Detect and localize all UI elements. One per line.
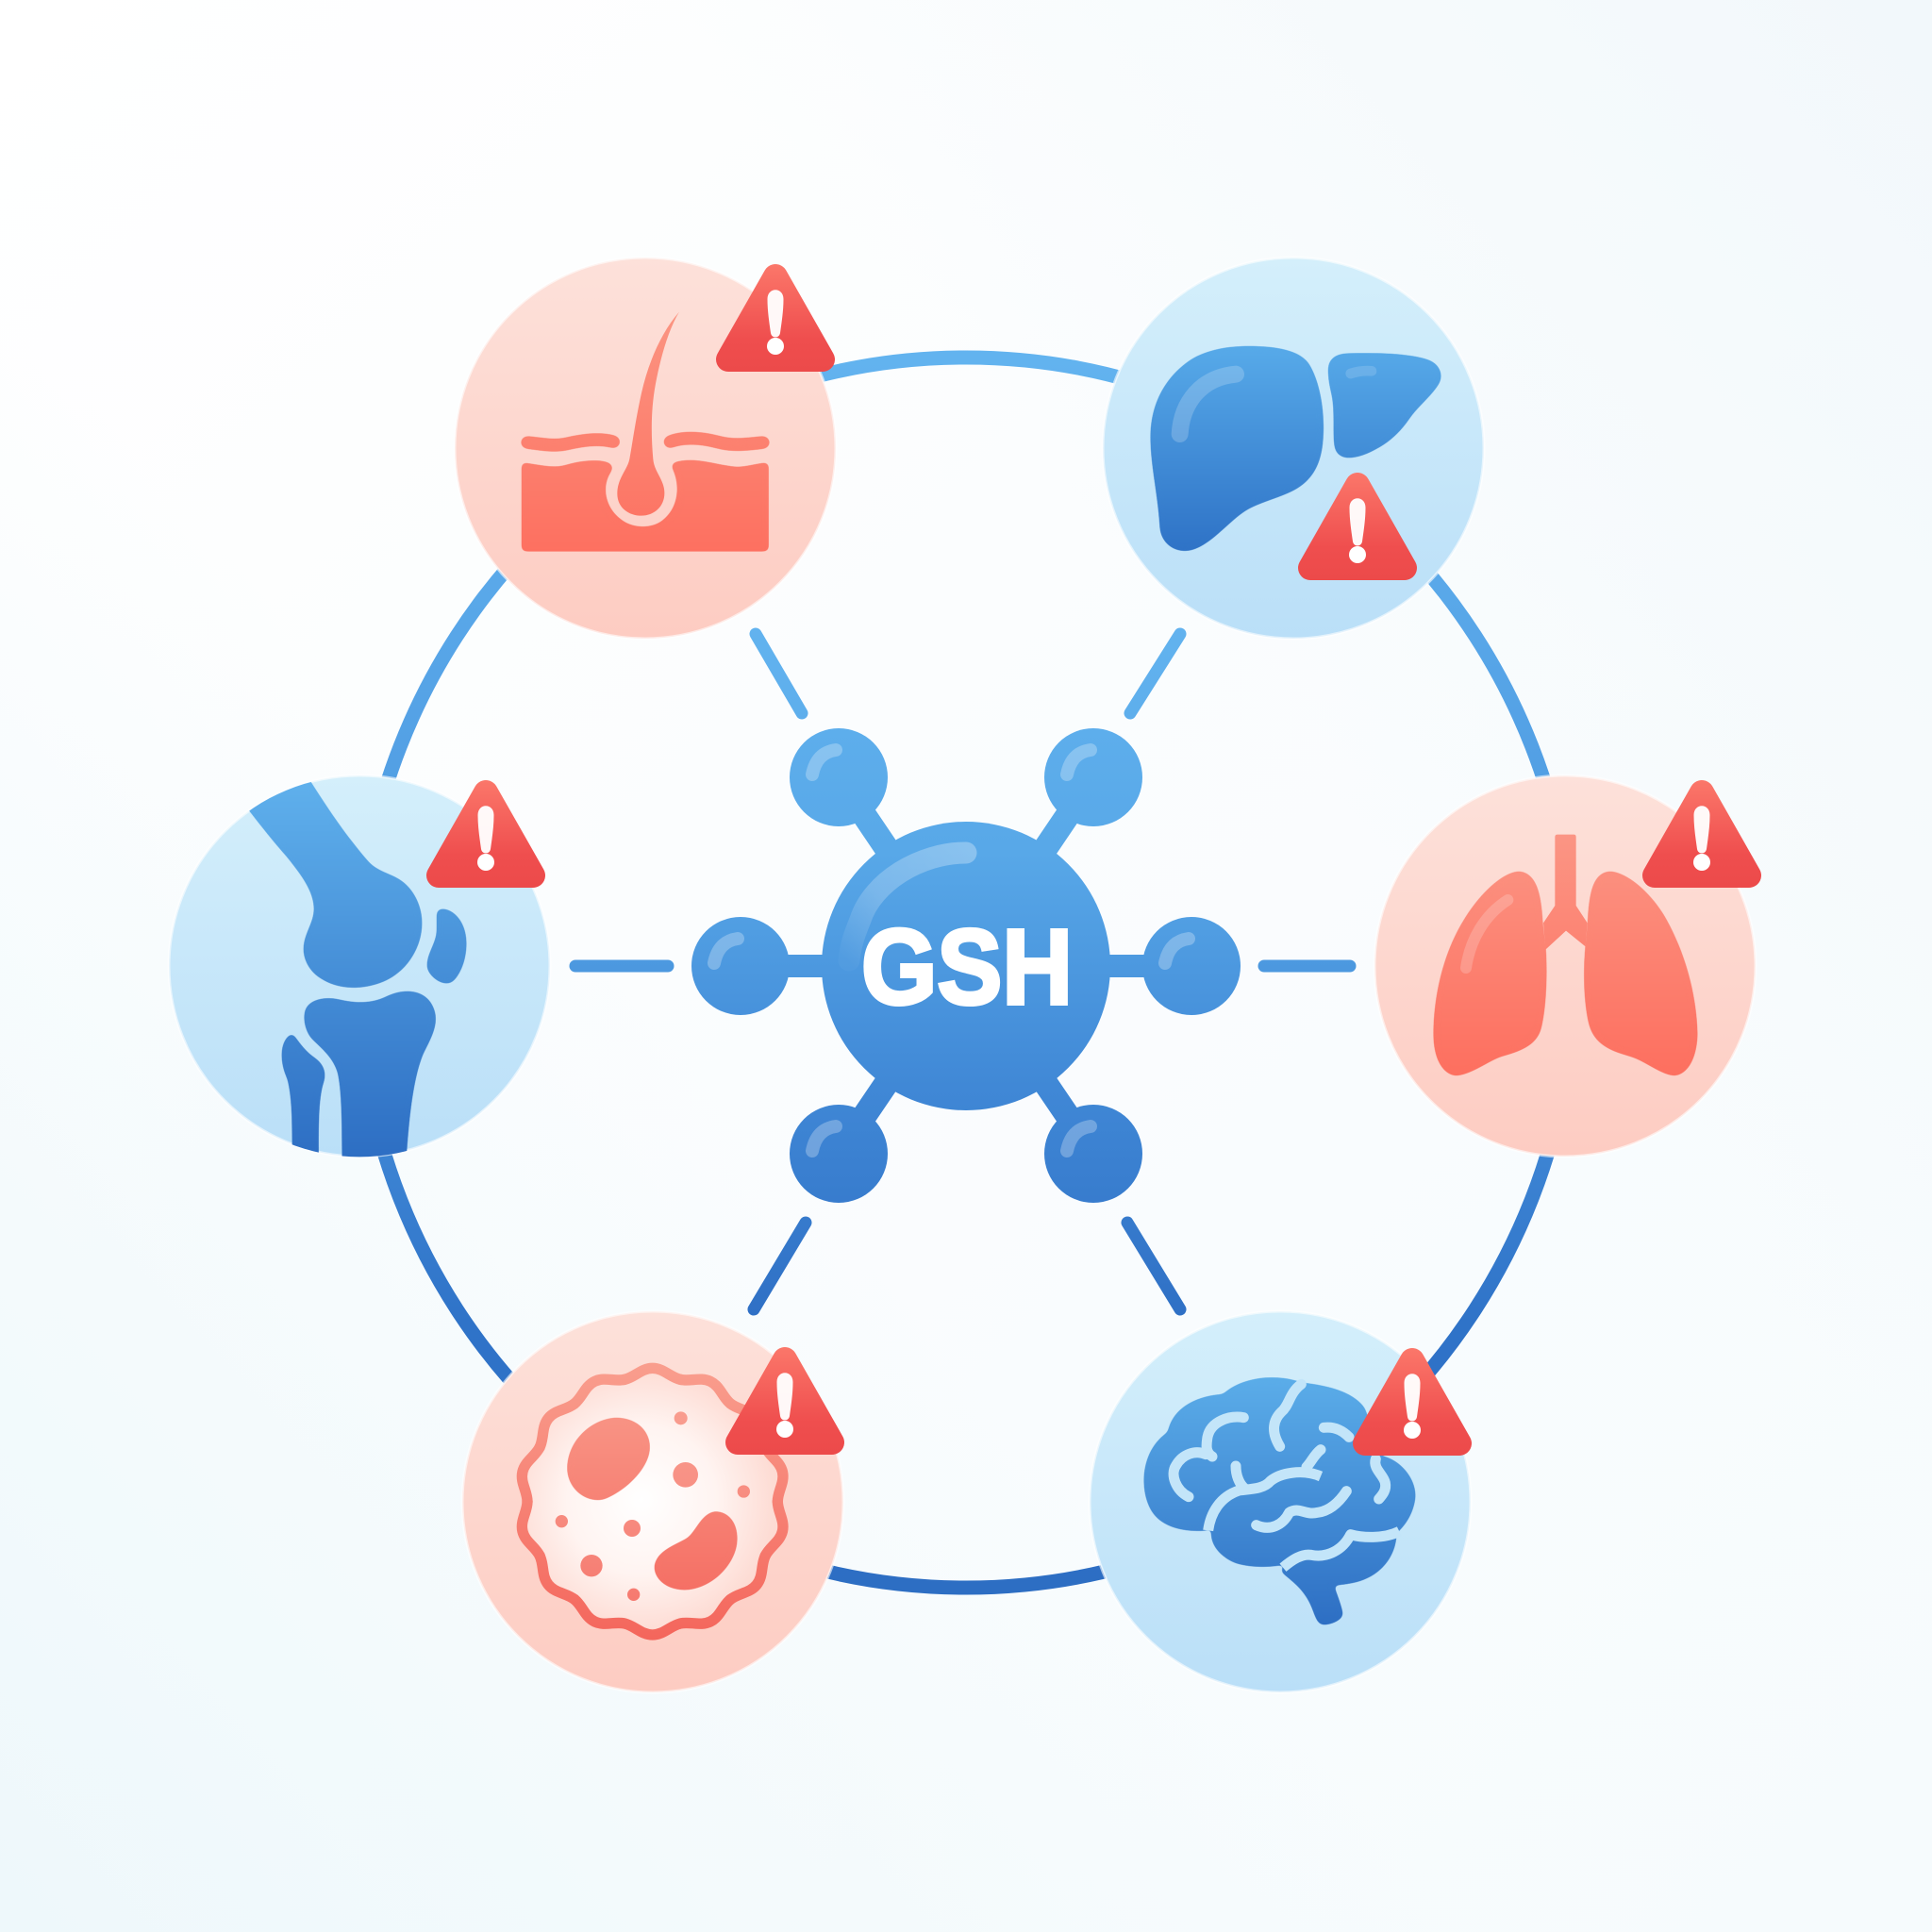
panel: knee joint — [169, 769, 550, 1173]
icon: hair follicle — [522, 312, 768, 551]
molecule atoms — [691, 728, 1241, 1203]
icon: warning triangle — [1365, 1360, 1459, 1443]
icon: warning triangle — [1655, 792, 1749, 875]
atom highlights — [714, 750, 1189, 1151]
icon: lungs — [1434, 835, 1697, 1075]
icon: brain — [1144, 1378, 1415, 1624]
hub highlight — [849, 853, 966, 960]
panel: liver — [1103, 258, 1484, 639]
icon: warning triangle — [1310, 485, 1405, 568]
spoke dashes between hub and organs — [575, 634, 1350, 1309]
icon: cell — [517, 1362, 789, 1641]
outer connecting ring — [358, 358, 1574, 1588]
panel: skin and hair follicle — [455, 258, 836, 639]
GSH molecule hub — [691, 728, 1241, 1203]
panel: damaged cell — [462, 1311, 844, 1692]
icon: liver — [1151, 346, 1441, 551]
icon: warning triangle — [728, 276, 823, 359]
GSH label: GSH — [861, 908, 1073, 1026]
molecule bonds — [741, 777, 1191, 1154]
icon: warning triangle — [738, 1359, 832, 1442]
panel: brain — [1090, 1311, 1471, 1692]
panel: lungs — [1374, 775, 1756, 1157]
icon: warning triangle — [439, 792, 533, 875]
icon: knee joint — [249, 782, 467, 1157]
